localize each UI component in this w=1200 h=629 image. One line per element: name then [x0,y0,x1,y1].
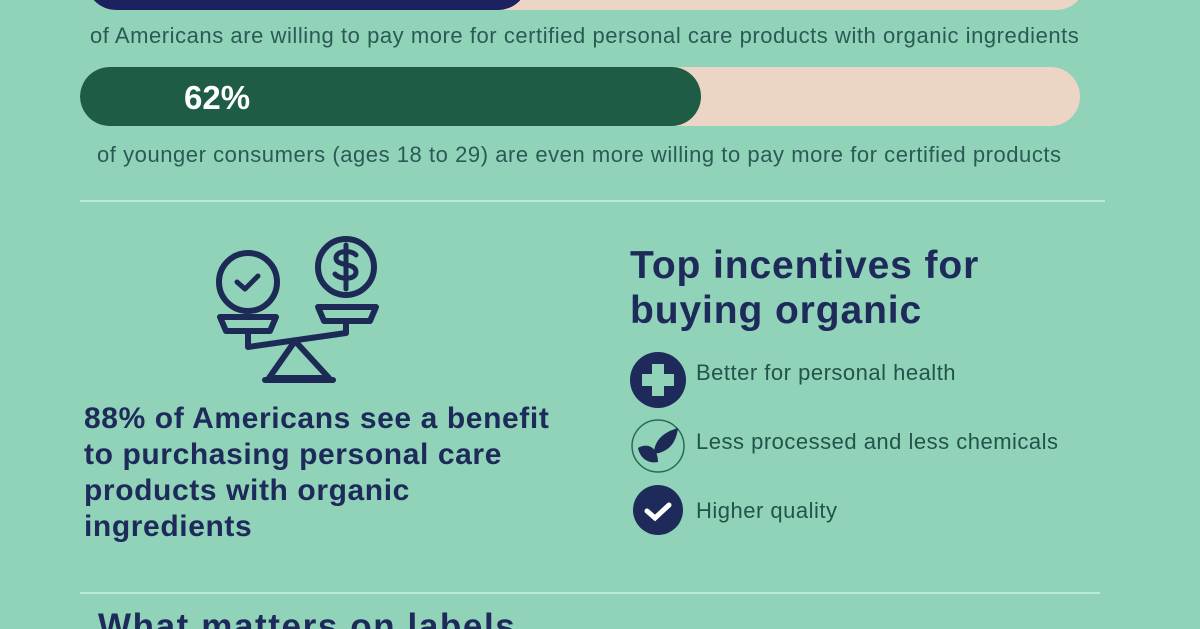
heading: top incentives: Top incentives for [630,244,979,287]
caption 1: of Americans are willing to pay more for certified personal care products with organic ingredients [90,23,1079,48]
item 1: Better for personal health [696,360,956,385]
item 2: Less processed and less chemicals [696,429,1059,454]
icon: cross [630,352,686,408]
stat text: 88% of Americans see a benefit to purchasing personal care products with organic ingredients [84,402,549,543]
heading: top incentives [630,244,979,332]
incentives list [630,352,1059,535]
bar 1 [86,0,1086,10]
bar 2: 62% [184,79,250,116]
item 3: Higher quality [696,498,838,523]
caption 2: of younger consumers (ages 18 to 29) are even more willing to pay more for certified products [97,142,1062,167]
bar 2 [80,67,1080,126]
icon: check [633,485,683,535]
heading: top incentives: buying organic [630,289,922,332]
icon: scale [216,236,379,383]
icon: leaves [631,419,685,473]
